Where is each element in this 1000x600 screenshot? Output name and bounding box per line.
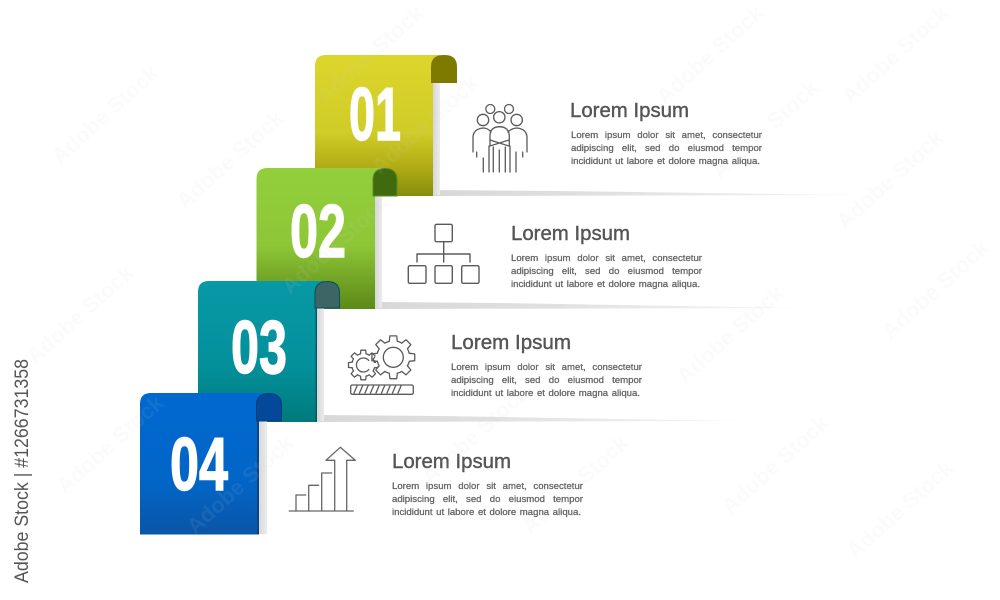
text block: 02: adipiscing elit, sed do eiusmod tempor (511, 266, 702, 277)
text block: 04: incididunt ut labore et dolore magna aliqua. (392, 507, 581, 518)
icon: gears with progress bar (348, 336, 415, 394)
number: 03: 03 (231, 305, 287, 389)
watermark pattern: Adobe Stock (22, 260, 139, 369)
watermark pattern: Adobe Stock (52, 390, 169, 499)
watermark pattern: Adobe Stock (312, 0, 429, 109)
watermark pattern: Adobe Stock (832, 125, 949, 234)
text block: 02: Lorem ipsum dolor sit amet, consectetur (511, 253, 702, 264)
text block: 03: Lorem ipsum dolor sit amet, consectetur (451, 362, 642, 373)
icon: team of people (473, 104, 527, 172)
watermark pattern: Adobe Stock (877, 235, 994, 344)
ribbon fold: 02 (373, 168, 397, 196)
panel: step 02 (256, 168, 777, 309)
icon: org chart (408, 224, 479, 283)
watermark pattern: Adobe Stock (652, 0, 769, 109)
text block: 04: Lorem ipsum dolor sit amet, consectetur (392, 481, 583, 492)
ribbon fold: 01 (431, 55, 457, 83)
number: 01: 01 (349, 72, 401, 156)
text block: 04: adipiscing elit, sed do eiusmod tempor (392, 494, 583, 505)
text block: 01: Lorem ipsum dolor sit amet, consectetur (571, 130, 762, 141)
panel: step 01 (315, 55, 831, 196)
heading: 04: Lorem Ipsum (392, 451, 511, 473)
ribbon: 03 (198, 281, 324, 422)
watermark pattern: Adobe Stock (517, 430, 634, 539)
text block: 02 (511, 253, 702, 290)
watermark pattern: Adobe Stock (277, 190, 394, 299)
stock id caption: Adobe Stock | #1266731358 (12, 359, 33, 583)
watermark pattern: Adobe Stock (672, 280, 789, 389)
panel: step 03 (198, 281, 721, 422)
heading: 02: Lorem Ipsum (511, 223, 630, 245)
ribbon: 02 (256, 168, 382, 309)
ribbon: 01 (315, 55, 440, 196)
icon: growth bar chart with arrow (289, 447, 355, 511)
text block: 03: adipiscing elit, sed do eiusmod tempor (451, 375, 642, 386)
ribbon fold: 04 (256, 394, 282, 421)
text block: 01: incididunt ut labore et dolore magna aliqua. (571, 156, 760, 167)
text block: 03 (451, 362, 642, 399)
ribbon: 04 (140, 393, 266, 534)
text block: 04 (392, 481, 583, 518)
watermark pattern: Adobe Stock (172, 105, 289, 214)
ribbon fold: 03 (315, 282, 340, 308)
text block: 01 (571, 130, 762, 167)
panel: step 04 (140, 393, 583, 534)
number: 04: 04 (170, 422, 228, 506)
text block: 01: adipiscing elit, sed do eiusmod tempor (571, 143, 762, 154)
watermark pattern: Adobe Stock (837, 0, 954, 109)
heading: 03: Lorem Ipsum (451, 332, 571, 354)
watermark pattern: Adobe Stock (47, 60, 164, 169)
watermark pattern: Adobe Stock (182, 430, 299, 539)
text block: 02: incididunt ut labore et dolore magna aliqua. (511, 279, 700, 290)
watermark pattern: Adobe Stock (367, 70, 484, 179)
watermark pattern: Adobe Stock (842, 455, 959, 564)
watermark pattern: Adobe Stock (707, 75, 824, 184)
watermark pattern: Adobe Stock (717, 410, 834, 519)
watermark pattern: Adobe Stock (417, 380, 534, 489)
heading: 01: Lorem Ipsum (570, 100, 689, 122)
text block: 03: incididunt ut labore et dolore magna aliqua. (451, 388, 640, 399)
number: 02: 02 (290, 189, 346, 273)
